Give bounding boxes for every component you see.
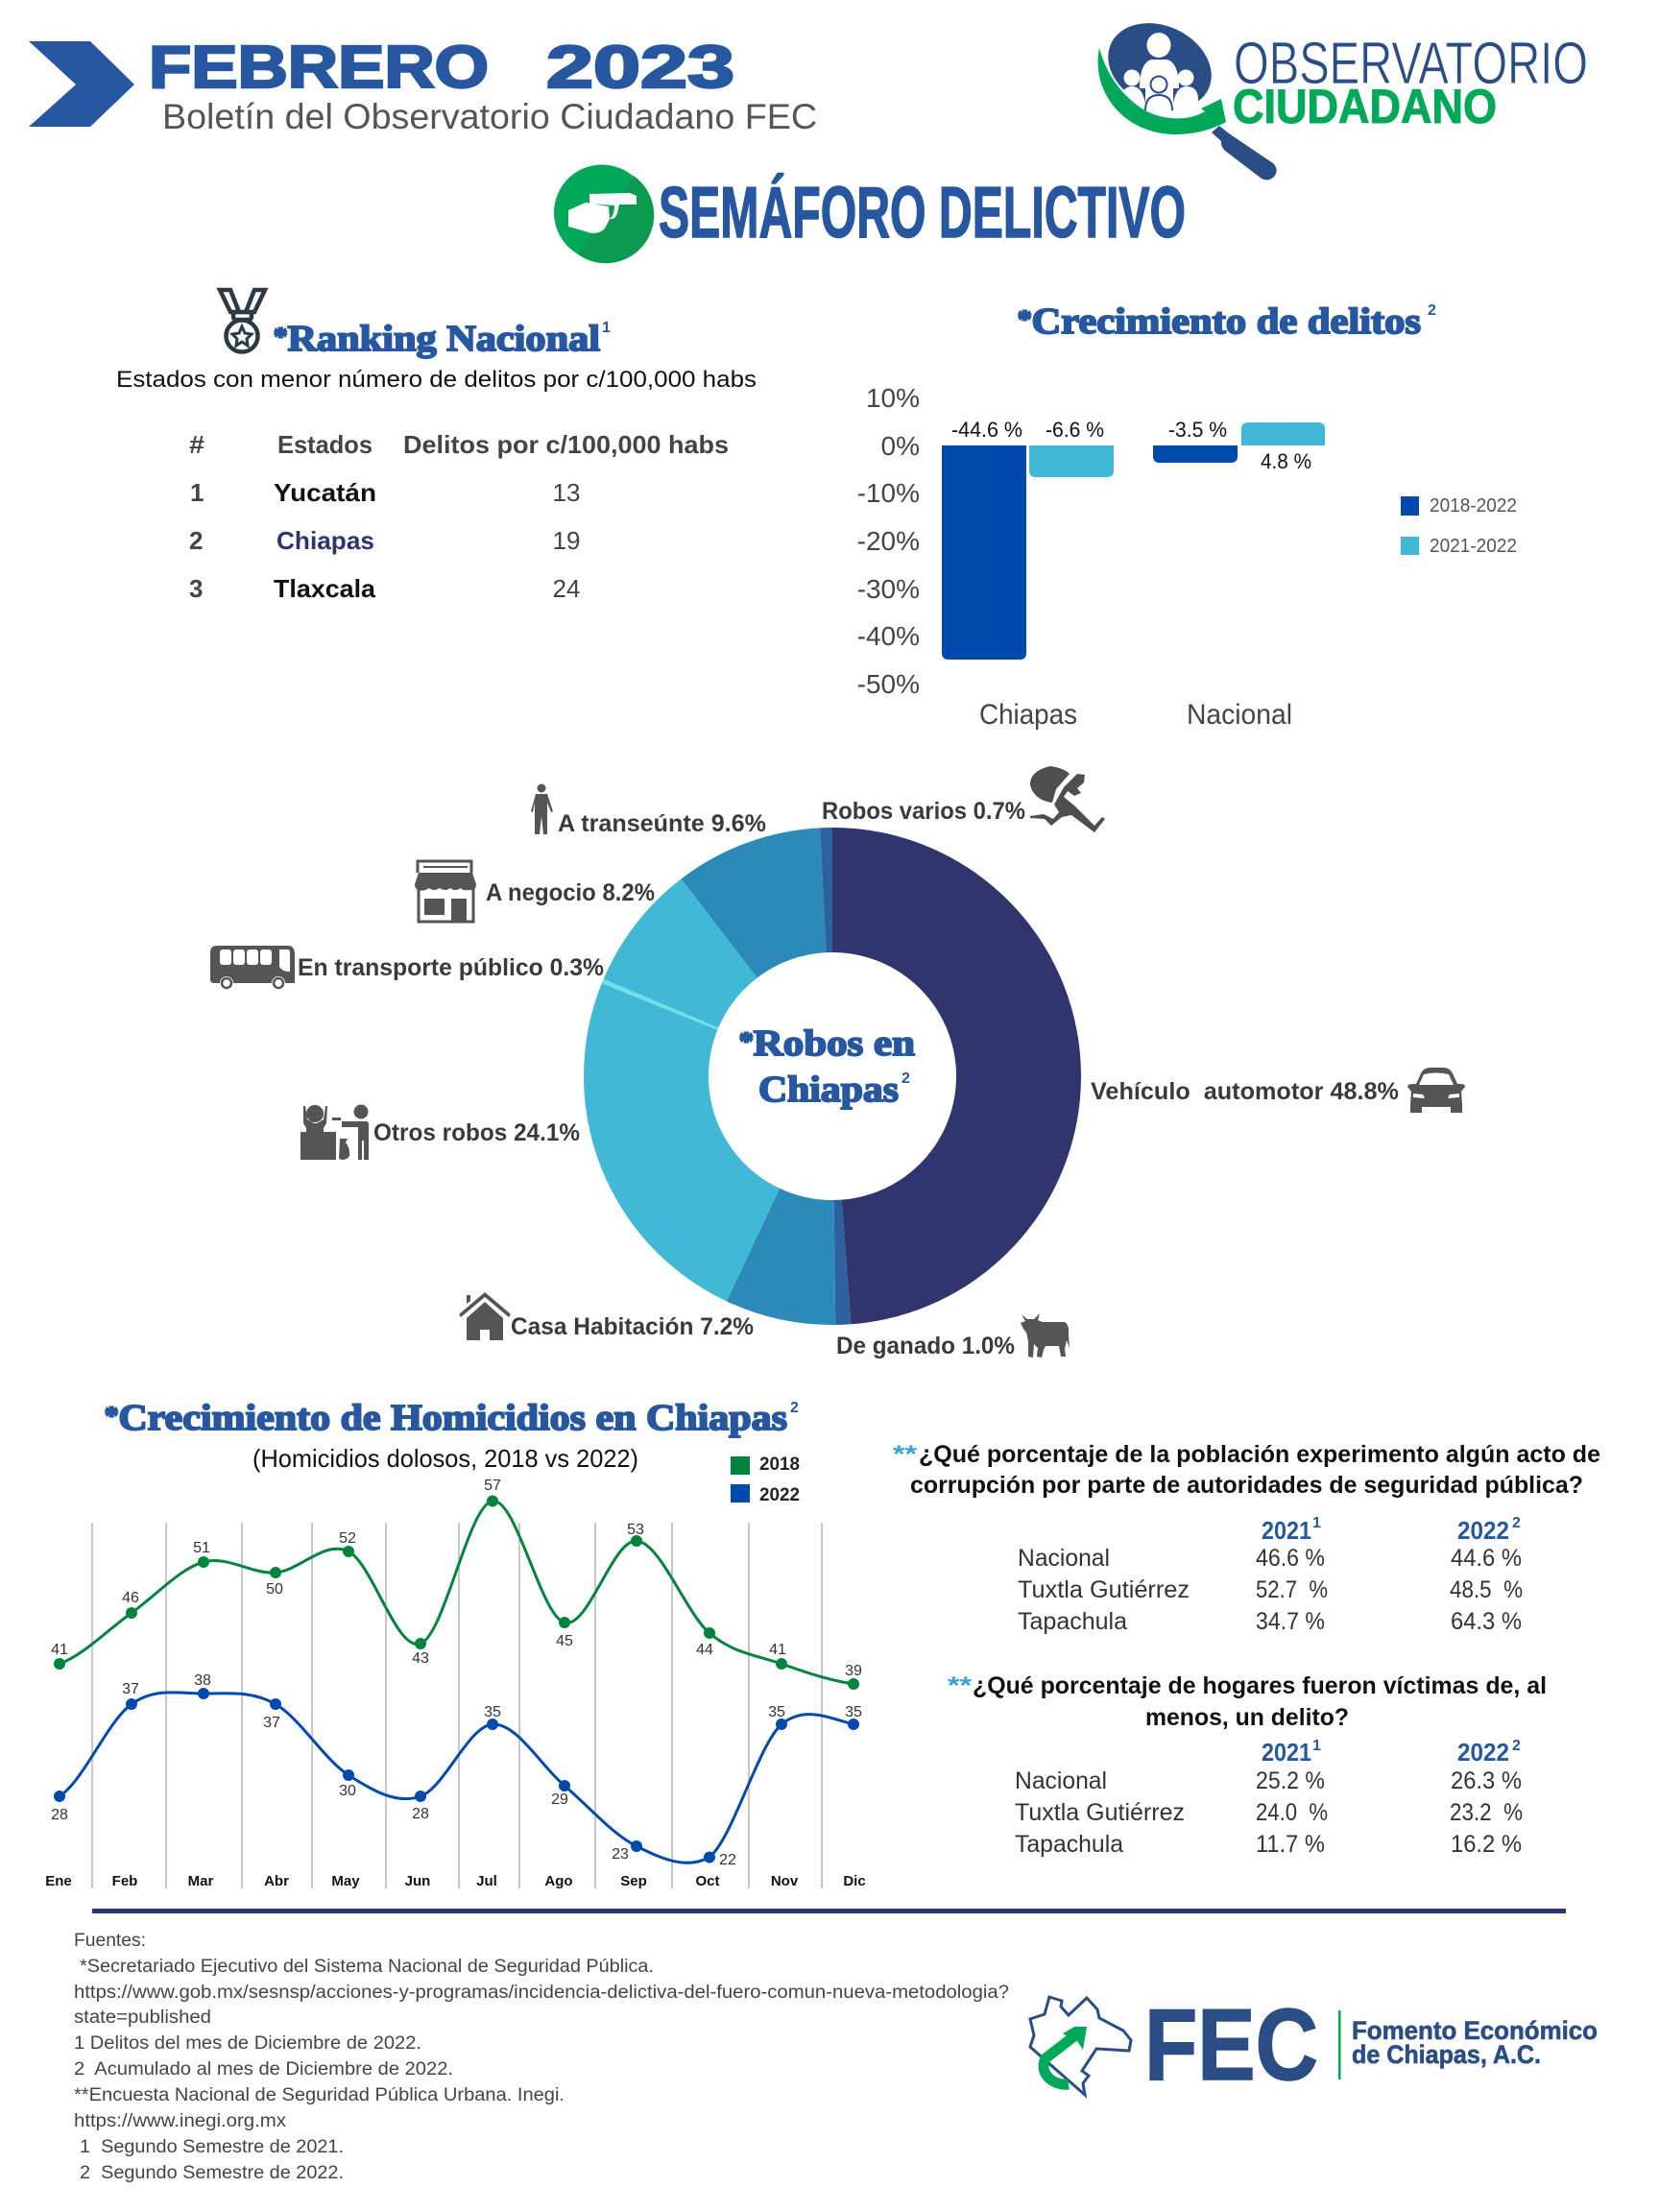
question 2 bbox=[948, 1672, 1547, 1731]
table: ranking: 13 bbox=[553, 478, 580, 507]
table 1: 34.7 % bbox=[1256, 1608, 1325, 1635]
line chart: 28 bbox=[51, 1807, 68, 1823]
text: FEC: FEC bbox=[1144, 1988, 1318, 2102]
bar chart: 10% bbox=[866, 383, 920, 413]
table: ranking: # bbox=[189, 430, 205, 459]
label: robos varios bbox=[822, 766, 1105, 832]
footer: sources: https://www.gob.mx/sesnsp/acciones-y-programas/incidencia-delictiva-del-fuero-comun-nueva-metodologia? bbox=[74, 1983, 1009, 2003]
title: FEBRERO 2023: 2023 bbox=[546, 35, 734, 101]
label: casa habitación: Casa Habitación 7.2% bbox=[511, 1313, 754, 1340]
table 2: 2 bbox=[1512, 1738, 1521, 1754]
footer: sources: *Secretariado Ejecutivo del Sistema Nacional de Seguridad Pública. bbox=[80, 1957, 654, 1977]
heading: ranking nacional: Ranking Nacional bbox=[287, 319, 600, 359]
bar chart: -20% bbox=[857, 526, 920, 556]
label: a transeúnte: A transeúnte 9.6% bbox=[558, 810, 766, 837]
bar chart: -40% bbox=[857, 621, 920, 651]
question 1: ¿Qué porcentaje de la población experimento algún acto de bbox=[919, 1441, 1600, 1468]
icon: hand with gun bbox=[554, 165, 654, 263]
question 1 bbox=[893, 1441, 1600, 1499]
table 2: Tuxtla Gutiérrez bbox=[1015, 1799, 1185, 1826]
table 2: 26.3 % bbox=[1451, 1767, 1522, 1794]
line chart: 50 bbox=[266, 1581, 283, 1598]
label: de ganado bbox=[836, 1313, 1070, 1359]
subtitle: Estados con menor número de delitos por c/100,000 habs bbox=[116, 367, 757, 393]
line chart: 43 bbox=[412, 1650, 429, 1667]
table 2: 24.0 % bbox=[1256, 1799, 1328, 1826]
table 2: Tapachula bbox=[1015, 1831, 1123, 1858]
bar chart: -10% bbox=[857, 478, 920, 508]
heading: Crecimiento de Homicidios en Chiapas bbox=[118, 1398, 787, 1438]
panel: crecimiento de homicidios bbox=[45, 1398, 866, 1889]
label: a negocio: A negocio 8.2% bbox=[486, 879, 655, 906]
label: vehículo automotor: Vehículo automotor 48.8% bbox=[1091, 1078, 1399, 1105]
donut center title: * bbox=[739, 1027, 754, 1055]
heading: Semáforo delictivo bbox=[554, 165, 1186, 263]
legend: 2018-2022 bbox=[1430, 495, 1517, 517]
table 2: 11.7 % bbox=[1256, 1831, 1325, 1858]
label: a negocio bbox=[415, 861, 655, 922]
question 2: ** bbox=[948, 1672, 972, 1699]
subtitle: (Homicidios dolosos, 2018 vs 2022) bbox=[252, 1444, 638, 1473]
table: ranking: 3 bbox=[189, 574, 203, 603]
line chart: 41 bbox=[51, 1642, 68, 1658]
line chart: 35 bbox=[768, 1704, 785, 1720]
footer: sources: 2 Segundo Semestre de 2022. bbox=[80, 2163, 344, 2183]
label: a transeúnte bbox=[531, 783, 766, 837]
table 2: 25.2 % bbox=[1256, 1767, 1325, 1794]
line chart: Dic bbox=[843, 1873, 866, 1889]
title: FEBRERO 2023 bbox=[149, 35, 734, 101]
bar chart: -3.5 % bbox=[1168, 418, 1227, 442]
panel: crecimiento de delitos bbox=[857, 301, 1517, 731]
table 2: 2021 bbox=[1262, 1738, 1311, 1767]
table 2 bbox=[1015, 1738, 1523, 1858]
line chart: 28 bbox=[412, 1806, 429, 1822]
question 1: ** bbox=[893, 1441, 917, 1468]
line chart: 30 bbox=[339, 1783, 356, 1799]
heading: * bbox=[105, 1402, 118, 1430]
line chart: 53 bbox=[627, 1522, 644, 1538]
table: ranking bbox=[189, 430, 729, 603]
table 1: Nacional bbox=[1018, 1545, 1110, 1572]
donut center title bbox=[739, 1023, 915, 1110]
panel: corrupción bbox=[893, 1441, 1600, 1635]
table: ranking: Tlaxcala bbox=[274, 574, 376, 603]
footer: sources: 1 Segundo Semestre de 2021. bbox=[80, 2137, 344, 2157]
heading: crecimiento de delitos: Crecimiento de delitos bbox=[1032, 301, 1421, 342]
question 2: ¿Qué porcentaje de hogares fueron víctimas de, al bbox=[973, 1672, 1547, 1699]
footer: sources: 1 Delitos del mes de Diciembre de 2022. bbox=[74, 2033, 421, 2054]
line chart: Jun bbox=[405, 1873, 430, 1889]
footer: sources: state=published bbox=[74, 2008, 211, 2028]
line chart: Mar bbox=[188, 1873, 213, 1889]
line chart: 39 bbox=[845, 1663, 862, 1679]
table 1: 64.3 % bbox=[1451, 1608, 1522, 1635]
table: ranking: 19 bbox=[553, 526, 580, 555]
table 1: 44.6 % bbox=[1451, 1545, 1522, 1572]
line chart: 41 bbox=[769, 1642, 786, 1658]
panel: hogares víctimas bbox=[948, 1672, 1547, 1858]
line chart: Nov bbox=[771, 1873, 799, 1889]
bar chart: 0% bbox=[881, 431, 920, 461]
line chart: 37 bbox=[122, 1681, 139, 1697]
table: ranking: Estados bbox=[277, 430, 373, 459]
donut center title: Chiapas bbox=[758, 1070, 899, 1110]
line chart: 37 bbox=[263, 1715, 280, 1731]
label: de ganado: De ganado 1.0% bbox=[836, 1333, 1015, 1359]
table: ranking: 1 bbox=[190, 478, 204, 507]
superscript 2: 2 bbox=[790, 1400, 799, 1416]
line chart: Sep bbox=[620, 1873, 647, 1889]
footer: sources bbox=[74, 1931, 1009, 2183]
line chart: 23 bbox=[612, 1846, 629, 1863]
table 2: 23.2 % bbox=[1450, 1799, 1523, 1826]
icon: Chiapas map with arrow bbox=[1030, 1997, 1131, 2095]
label: vehículo automotor bbox=[1091, 1068, 1465, 1113]
line chart: Abr bbox=[264, 1873, 289, 1889]
bar chart: -50% bbox=[857, 669, 920, 699]
table 1: 2 bbox=[1512, 1515, 1521, 1531]
table 1: 46.6 % bbox=[1256, 1545, 1325, 1572]
table 1 bbox=[1018, 1515, 1523, 1635]
question 2: menos, un delito? bbox=[1145, 1704, 1349, 1731]
line chart: Ene bbox=[45, 1873, 72, 1889]
table: ranking: Yucatán bbox=[274, 478, 376, 507]
donut chart bbox=[646, 890, 1019, 1262]
line chart: 57 bbox=[484, 1478, 501, 1494]
donut center title: 2 bbox=[902, 1070, 910, 1087]
table: ranking: Delitos por c/100,000 habs bbox=[403, 430, 729, 459]
label: otros robos: Otros robos 24.1% bbox=[373, 1119, 580, 1146]
table 1: 52.7 % bbox=[1256, 1576, 1328, 1603]
table: ranking: Chiapas bbox=[276, 526, 374, 555]
footer: sources: Fuentes: bbox=[74, 1931, 146, 1951]
label: otros robos bbox=[301, 1104, 580, 1160]
line chart: 45 bbox=[556, 1633, 573, 1649]
label: en transporte público: En transporte público 0.3% bbox=[298, 954, 604, 981]
line chart: 22 bbox=[719, 1852, 736, 1868]
legend: 2018 bbox=[759, 1455, 800, 1475]
table 2: 1 bbox=[1312, 1738, 1321, 1754]
legend: 2022 bbox=[759, 1485, 800, 1505]
icon: chevron arrow bbox=[29, 41, 134, 127]
footer: sources: 2 Acumulado al mes de Diciembre de 2022. bbox=[74, 2059, 453, 2080]
heading: crecimiento de delitos: * bbox=[1018, 305, 1032, 333]
bar chart: Nacional bbox=[1187, 699, 1292, 731]
superscript 2: 2 bbox=[1428, 302, 1436, 319]
icon: medal bbox=[220, 290, 265, 351]
legend: 2021-2022 bbox=[1430, 536, 1517, 557]
panel: robos en Chiapas bbox=[210, 766, 1465, 1359]
line chart: 35 bbox=[484, 1704, 501, 1720]
table 1: 48.5 % bbox=[1450, 1576, 1523, 1603]
question 1: corrupción por parte de autoridades de seguridad pública? bbox=[910, 1472, 1583, 1499]
footer: sources: **Encuesta Nacional de Seguridad Pública Urbana. Inegi. bbox=[74, 2085, 565, 2105]
line chart: 29 bbox=[551, 1791, 568, 1808]
table 1: 1 bbox=[1312, 1515, 1321, 1531]
text: Fomento Económico de Chiapas: Fomento Económico bbox=[1352, 2016, 1598, 2045]
label: robos varios: Robos varios 0.7% bbox=[822, 798, 1025, 825]
line chart: 51 bbox=[193, 1540, 210, 1556]
line chart: 35 bbox=[845, 1704, 862, 1720]
line chart: May bbox=[331, 1873, 360, 1889]
donut center title: Robos en bbox=[754, 1023, 915, 1064]
text: Fomento Económico de Chiapas: de Chiapas, A.C. bbox=[1352, 2040, 1541, 2069]
heading: ranking nacional: * bbox=[274, 323, 287, 350]
footer: sources: https://www.inegi.org.mx bbox=[74, 2111, 287, 2131]
title text: SEMÁFORO DELICTIVO bbox=[659, 172, 1186, 252]
table 1: Tapachula bbox=[1018, 1608, 1127, 1635]
subtitle: Boletín del Observatorio Ciudadano FEC bbox=[162, 97, 817, 136]
text: Fomento Económico de Chiapas bbox=[1352, 2016, 1598, 2069]
line chart: Feb bbox=[112, 1873, 137, 1889]
logo: FEC bbox=[1030, 1988, 1598, 2102]
bar chart: Chiapas bbox=[979, 699, 1077, 731]
line chart: 52 bbox=[339, 1530, 356, 1547]
bar chart: -30% bbox=[857, 574, 920, 604]
table 1: 2021 bbox=[1262, 1516, 1311, 1545]
table: ranking: 2 bbox=[189, 526, 203, 555]
table 2: Nacional bbox=[1015, 1767, 1107, 1794]
bar chart: 4.8 % bbox=[1261, 449, 1311, 473]
line chart bbox=[45, 1478, 866, 1889]
legend bbox=[1401, 495, 1517, 557]
logo: Observatorio Ciudadano bbox=[1094, 7, 1588, 180]
bar chart bbox=[857, 383, 1325, 731]
line chart: Oct bbox=[695, 1873, 720, 1889]
label: en transporte público bbox=[210, 946, 604, 988]
line chart: 38 bbox=[194, 1672, 211, 1689]
line chart: 46 bbox=[122, 1590, 139, 1606]
icon: magnifier with people bbox=[1094, 7, 1277, 180]
table: ranking: 24 bbox=[553, 574, 580, 603]
table 1: 2022 bbox=[1457, 1516, 1509, 1545]
legend bbox=[731, 1455, 800, 1505]
title: FEBRERO 2023: FEBRERO bbox=[149, 35, 489, 101]
header: bulletin title bbox=[29, 35, 817, 136]
table 1: Tuxtla Gutiérrez bbox=[1018, 1576, 1190, 1603]
panel: ranking nacional bbox=[116, 290, 757, 603]
line chart: 44 bbox=[696, 1642, 713, 1658]
label: casa habitación bbox=[459, 1292, 754, 1340]
line chart: Jul bbox=[476, 1873, 497, 1889]
table 2: 2022 bbox=[1457, 1738, 1509, 1767]
bar chart: -44.6 % bbox=[951, 418, 1022, 442]
table 2: 16.2 % bbox=[1451, 1831, 1522, 1858]
bar chart: -6.6 % bbox=[1046, 418, 1104, 442]
text: CIUDADANO: CIUDADANO bbox=[1233, 80, 1497, 133]
line chart: Ago bbox=[544, 1873, 573, 1889]
superscript 1: 1 bbox=[602, 320, 611, 336]
